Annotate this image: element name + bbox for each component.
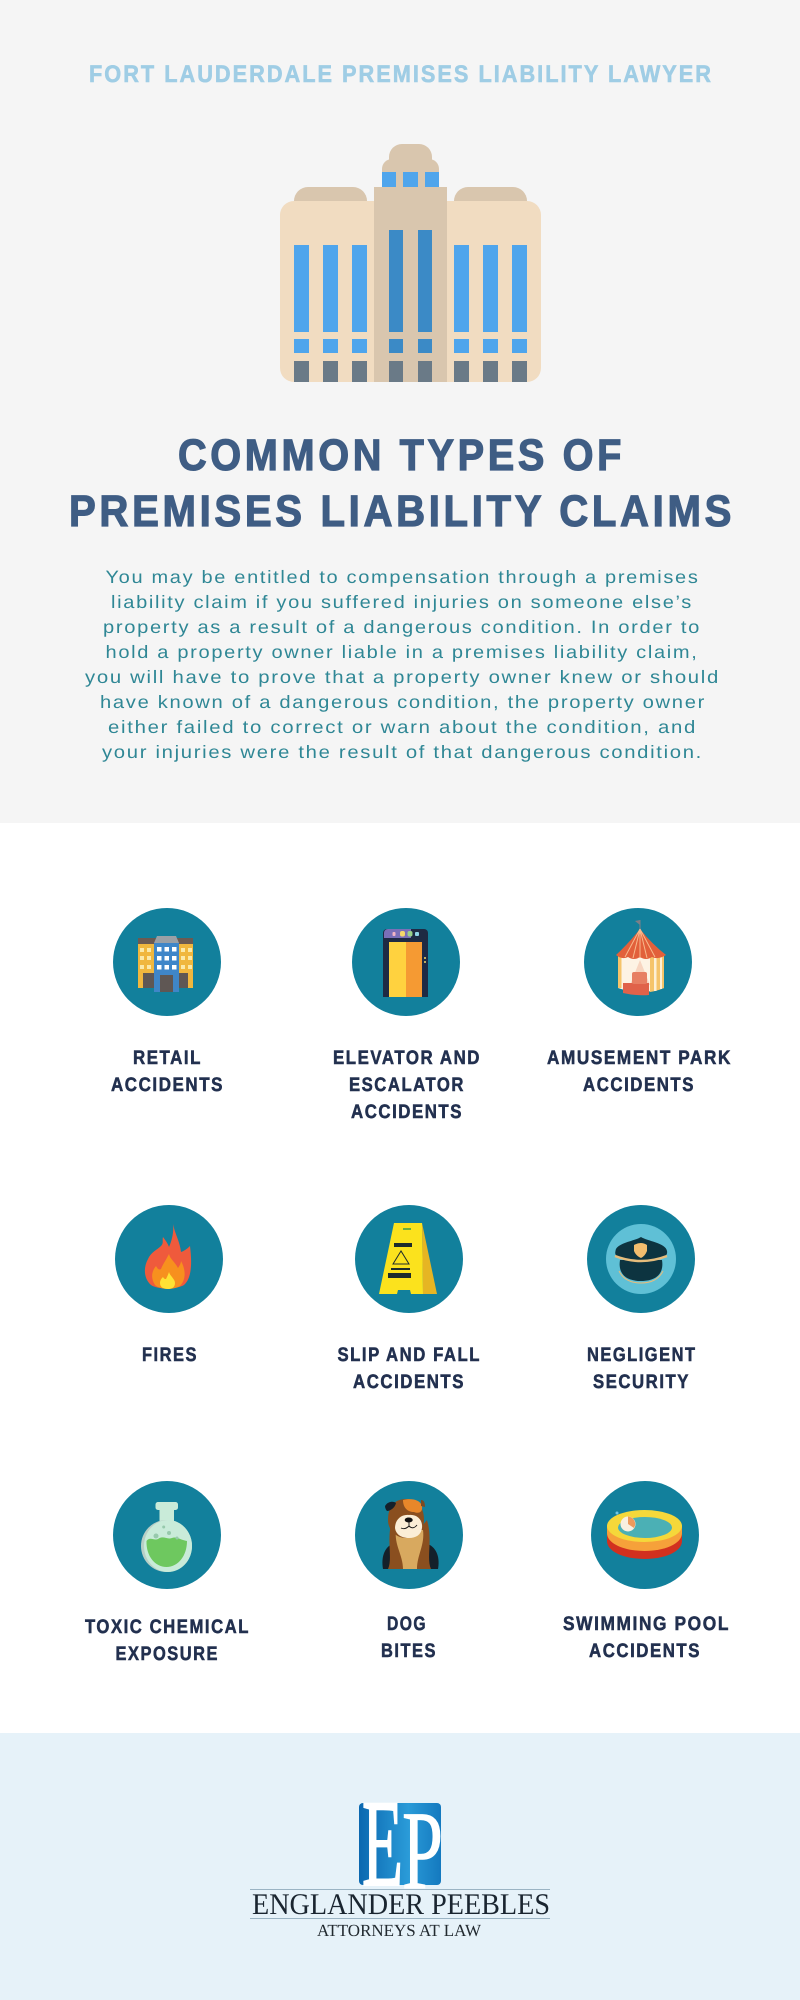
item: negligent security: [587, 1205, 696, 1393]
panel: header: [0, 0, 800, 823]
label: toxic chemical exposure: [85, 1616, 250, 1665]
item: dog bites: [355, 1481, 463, 1662]
intro paragraph: liability claim if you suffered injuries on someone else’s: [111, 592, 693, 612]
icon: retail building: [113, 908, 221, 1016]
icon: building: [280, 144, 541, 382]
label: elevator and escalator accidents: ELEVATOR AND: [333, 1047, 481, 1069]
label: slip and fall accidents: [338, 1344, 481, 1393]
tagline: ATTORNEYS AT LAW: [317, 1921, 482, 1940]
icon: chemical flask: [113, 1481, 221, 1589]
label: toxic chemical exposure: EXPOSURE: [116, 1643, 219, 1665]
label: negligent security: NEGLIGENT: [587, 1344, 696, 1366]
item: elevator and escalator accidents: [333, 908, 481, 1123]
icon: carnival tent: [584, 908, 692, 1016]
item: amusement park accidents: [547, 908, 732, 1096]
label: elevator and escalator accidents: [333, 1047, 481, 1123]
firm name: ENGLANDER PEEBLES: [252, 1888, 550, 1921]
label: elevator and escalator accidents: ACCIDENTS: [351, 1101, 463, 1123]
label: swimming pool accidents: SWIMMING POOL: [563, 1613, 730, 1635]
label: retail accidents: [111, 1047, 224, 1096]
panel: footer: [0, 1733, 800, 2000]
intro paragraph: hold a property owner liable in a premises liability claim,: [106, 642, 698, 662]
logo: Englander Peebles: [250, 1775, 550, 1940]
item: swimming pool accidents: [563, 1481, 730, 1662]
icon: security guard cap: [587, 1205, 695, 1313]
main heading: PREMISES LIABILITY CLAIMS: [69, 487, 735, 536]
label: elevator and escalator accidents: ESCALATOR: [349, 1074, 465, 1096]
intro paragraph: property as a result of a dangerous condition. In order to: [103, 617, 701, 637]
icon: flame: [115, 1205, 223, 1313]
icon: wet floor sign: [355, 1205, 463, 1313]
label: slip and fall accidents: SLIP AND FALL: [338, 1344, 481, 1366]
label: swimming pool accidents: [563, 1613, 730, 1662]
label: dog bites: BITES: [381, 1640, 437, 1662]
label: retail accidents: RETAIL: [133, 1047, 202, 1069]
intro paragraph: either failed to correct or warn about the condition, and: [108, 717, 697, 737]
panel: claim types grid: [85, 908, 732, 1665]
item: slip and fall accidents: [338, 1205, 481, 1393]
label: dog bites: DOG: [387, 1613, 427, 1635]
item: retail accidents: [111, 908, 224, 1096]
label: dog bites: [381, 1613, 437, 1662]
intro paragraph: [85, 567, 720, 762]
intro paragraph: You may be entitled to compensation through a premises: [106, 567, 700, 587]
item: fires: [115, 1205, 223, 1366]
item: toxic chemical exposure: [85, 1481, 250, 1665]
label: retail accidents: ACCIDENTS: [111, 1074, 224, 1096]
label: negligent security: SECURITY: [593, 1371, 690, 1393]
intro paragraph: your injuries were the result of that dangerous condition.: [102, 742, 703, 762]
intro paragraph: you will have to prove that a property owner knew or should: [85, 667, 720, 687]
main heading: COMMON TYPES OF: [178, 431, 625, 480]
logo mark: EP monogram: P: [402, 1789, 443, 1913]
label: fires: FIRES: [142, 1344, 198, 1366]
top title: FORT LAUDERDALE PREMISES LIABILITY LAWYER: [89, 61, 713, 88]
logo mark: EP monogram: E: [362, 1775, 403, 1912]
label: amusement park accidents: ACCIDENTS: [583, 1074, 695, 1096]
main heading: [69, 431, 735, 536]
label: amusement park accidents: AMUSEMENT PARK: [547, 1047, 732, 1069]
label: swimming pool accidents: ACCIDENTS: [589, 1640, 701, 1662]
icon: elevator: [352, 908, 460, 1016]
label: toxic chemical exposure: TOXIC CHEMICAL: [85, 1616, 250, 1638]
label: amusement park accidents: [547, 1047, 732, 1096]
label: negligent security: [587, 1344, 696, 1393]
label: slip and fall accidents: ACCIDENTS: [353, 1371, 465, 1393]
icon: inflatable pool: [591, 1481, 699, 1589]
intro paragraph: have known of a dangerous condition, the property owner: [100, 692, 706, 712]
icon: bulldog: [355, 1481, 463, 1589]
